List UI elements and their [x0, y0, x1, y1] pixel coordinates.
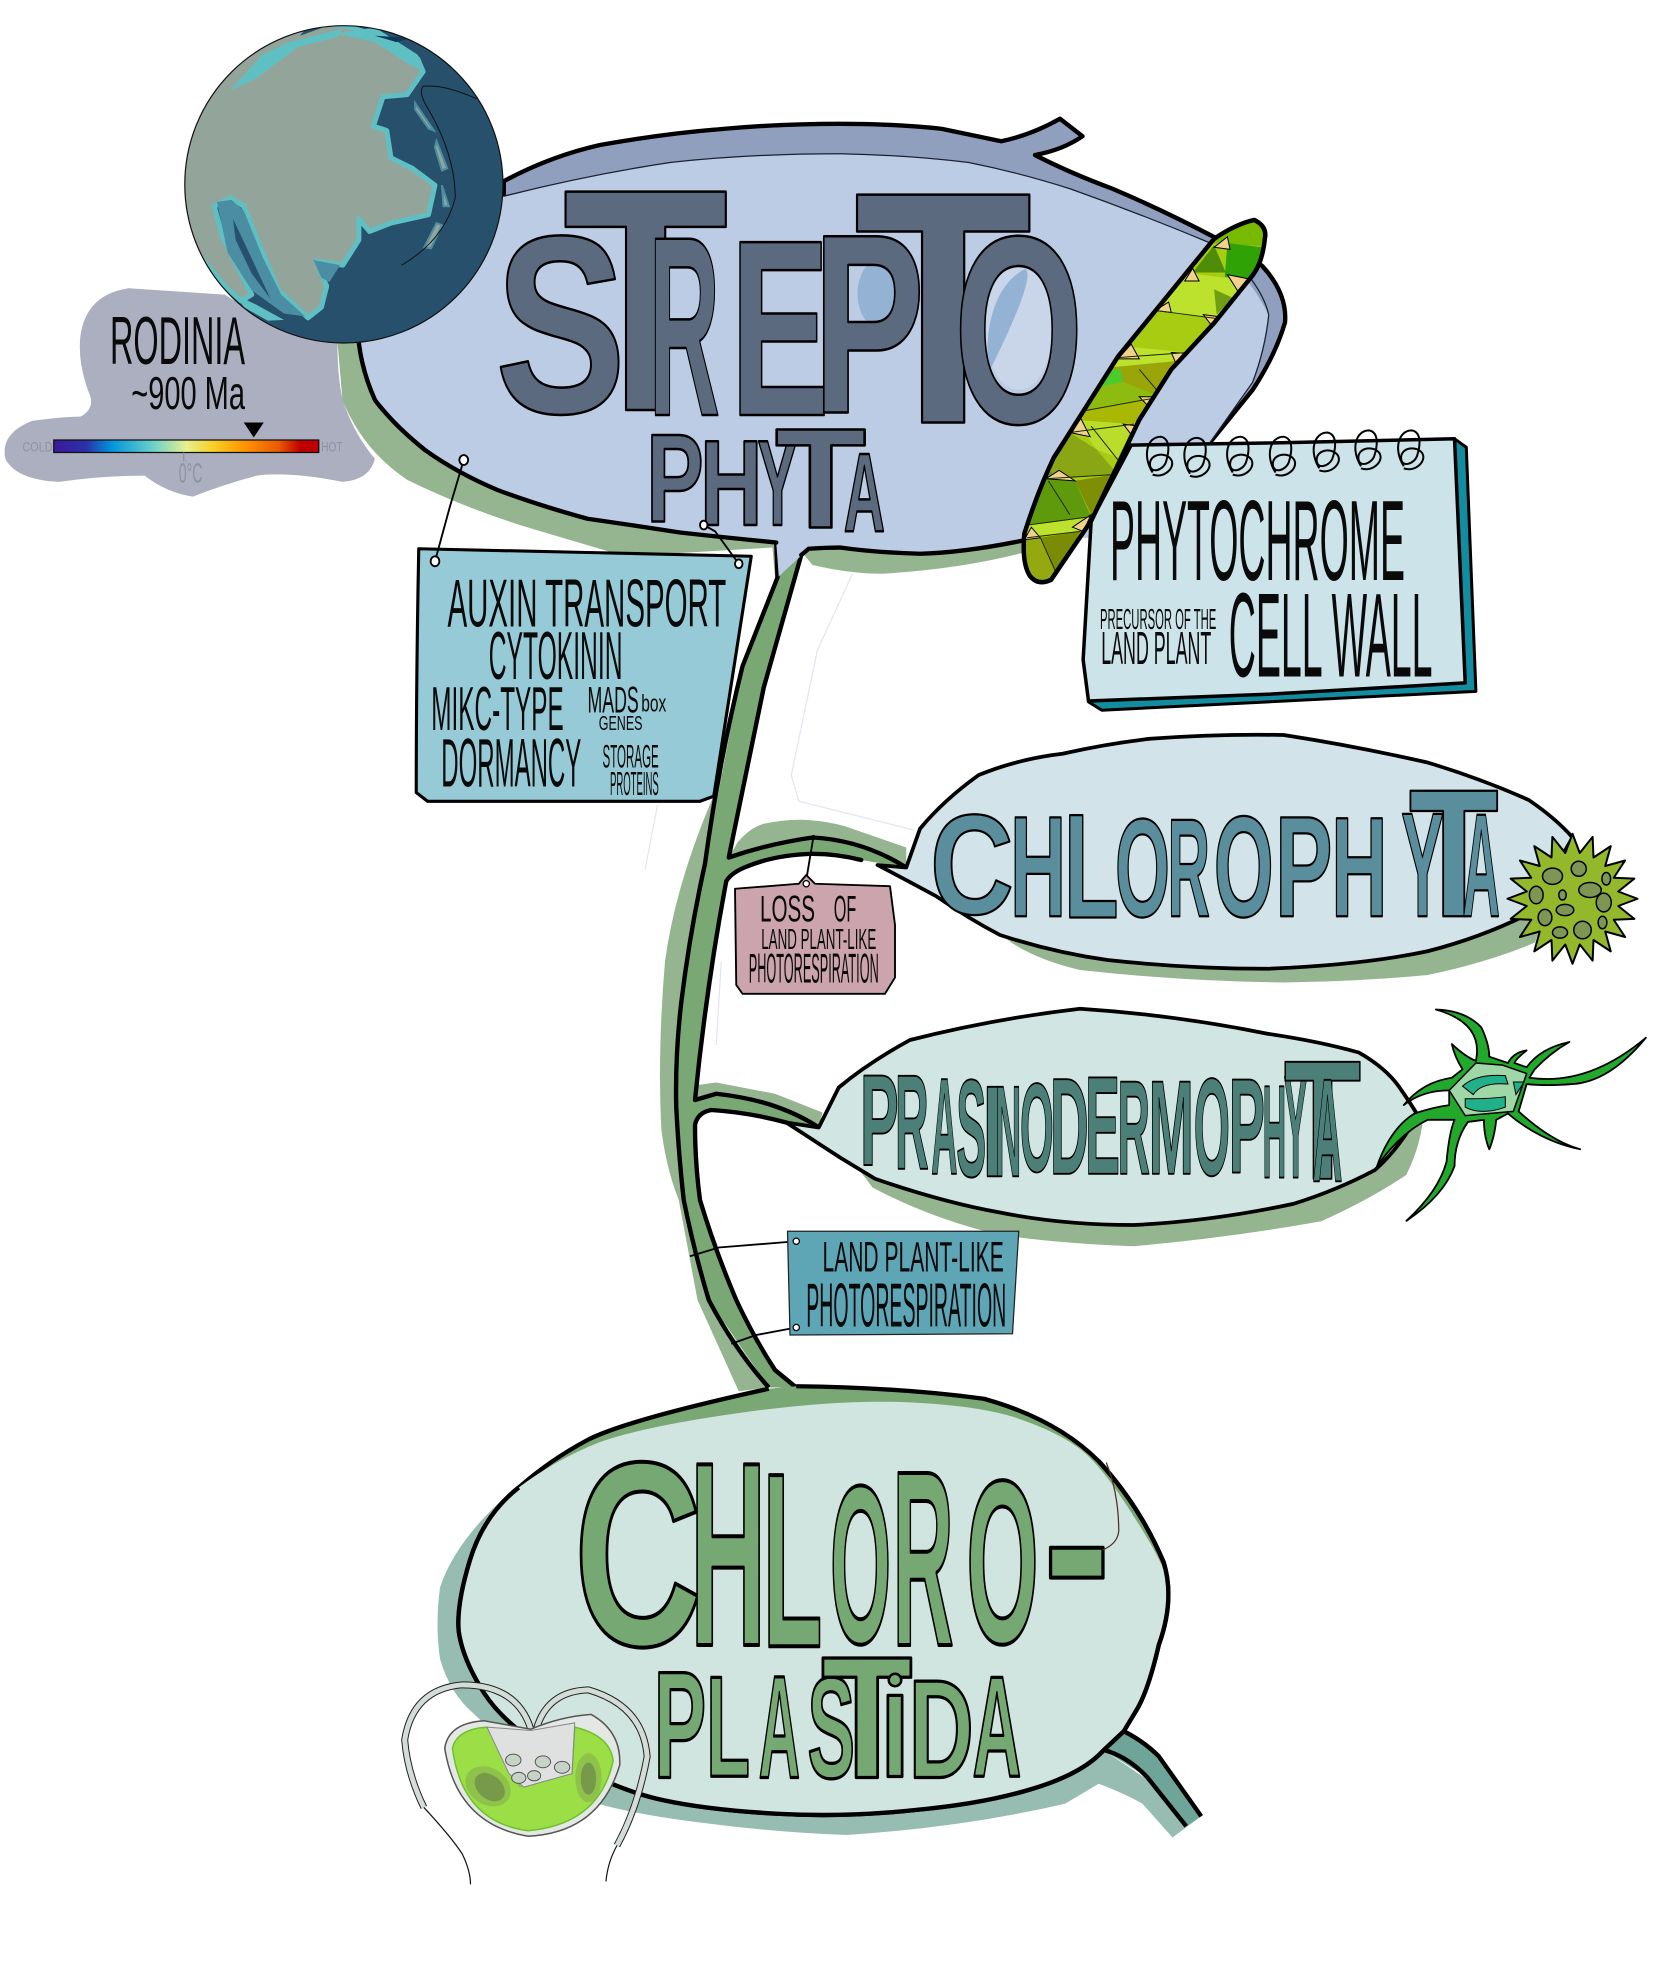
- polar cap: [300, 28, 323, 36]
- icon: filamentous alga: [1021, 218, 1268, 584]
- title: prasinodermophyta: H: [1262, 1058, 1286, 1206]
- green chloroplast: [452, 1727, 613, 1831]
- panel: chloroplastida: [458, 1386, 1201, 1826]
- temperature colour bar: [54, 440, 319, 452]
- green shadows of stem and branches: [338, 338, 1550, 1838]
- spiked body: [1508, 834, 1638, 964]
- landmass: [161, 17, 435, 318]
- hanging string: [806, 835, 814, 880]
- title: Strepto: P: [812, 181, 925, 467]
- stem and branches: [676, 542, 906, 1388]
- chloroplasts: [1463, 1075, 1524, 1111]
- label: box: box: [641, 690, 666, 717]
- panel: chlorophyta: A: [1462, 783, 1500, 948]
- title: prasinodermophyta: P: [860, 1047, 899, 1193]
- title: chloro-: H: [690, 1407, 766, 1701]
- stem left outline: [676, 542, 778, 1388]
- sign: land-plant traits: MIKC-TYPE: [431, 674, 564, 744]
- eyelet: [803, 881, 809, 887]
- title: plastida: P: [654, 1641, 706, 1811]
- title: chlorophyta: H: [1010, 787, 1066, 947]
- title: chlorophyta: T: [1409, 751, 1499, 955]
- eyelets: [793, 1238, 799, 1331]
- prasinodermophyta branch shadow: [695, 1082, 822, 1128]
- west shelf: [230, 29, 343, 90]
- spiral rings: [1147, 430, 1423, 477]
- title: chlorophyta: P: [1275, 787, 1332, 947]
- text: PHOTORESPIRATION: [749, 946, 879, 992]
- letter window highlights: [985, 265, 1052, 390]
- flagella tips: [424, 1807, 617, 1884]
- polar sea: [375, 36, 412, 42]
- title: prasinodermophyta: P: [1229, 1051, 1265, 1202]
- hanging strings: [435, 460, 739, 564]
- icon: spiky green alga: [1508, 834, 1638, 964]
- text: PHOTORESPIRATION: [806, 1270, 1006, 1340]
- title: chlorophyta: H: [1331, 788, 1387, 947]
- sign: land-plant traits: CYTOKININ: [489, 619, 622, 694]
- title: phyta: P: [646, 409, 704, 548]
- title: chloro-: R: [892, 1419, 954, 1698]
- notebook: phytochrome: LAND PLANT: [1101, 622, 1211, 674]
- title: Strepto: E: [730, 189, 830, 469]
- sign: land-plant traits: PROTEINS: [610, 765, 659, 803]
- label: age: ~900 Ma: [131, 367, 245, 419]
- cell arms: [1377, 1010, 1646, 1221]
- title: prasinodermophyta: R: [1117, 1054, 1150, 1203]
- sign: land-plant traits: DORMANCY: [441, 724, 581, 801]
- title: chlorophyta: R: [1167, 789, 1210, 946]
- grey caption blob: [5, 288, 375, 497]
- tail branch: [1104, 1731, 1201, 1826]
- text: AUXIN TRANSPORT: [447, 566, 726, 641]
- label: zero degrees: 0°C: [179, 457, 202, 488]
- bottom outline: [458, 1461, 1168, 1815]
- sign: land plant-like photorespiration: LAND PLANT-LIKE: [822, 1234, 1004, 1281]
- title: prasinodermophyta: O: [1194, 1050, 1230, 1205]
- eyelets: [431, 455, 742, 568]
- deep inlet: [233, 219, 270, 299]
- panel: prasinodermophyta: [786, 1009, 1418, 1225]
- zero tick: [183, 452, 185, 461]
- pyrenoid left: [456, 1760, 520, 1813]
- chloroplastida shadow: [438, 1486, 1201, 1838]
- green rim and outer outline: [458, 1386, 1168, 1815]
- title: chloro-: O: [830, 1439, 891, 1691]
- bottom outline: [359, 342, 1038, 555]
- title: prasinodermophyta: S: [956, 1051, 986, 1206]
- title: prasinodermophyta: E: [1085, 1047, 1120, 1204]
- alga outline: [1024, 220, 1265, 582]
- marker triangle: [244, 422, 264, 438]
- pyrenoid right core: [581, 1763, 596, 1795]
- strings: [690, 1241, 796, 1344]
- icon: branching green cell: [1377, 1010, 1646, 1221]
- stem fill: [676, 555, 906, 1388]
- bay shelf: [313, 260, 340, 282]
- title: plastida: A: [759, 1646, 800, 1809]
- dot of letter i: [889, 1674, 901, 1686]
- panel: streptophyta: [359, 119, 1285, 576]
- title: chlorophyta: C: [930, 786, 1014, 945]
- light body: [359, 154, 1269, 576]
- surface plates: [1529, 861, 1611, 939]
- sign board: [416, 549, 751, 801]
- title: prasinodermophyta: O: [1020, 1057, 1054, 1198]
- title: prasinodermophyta: M: [1149, 1054, 1194, 1203]
- title: plastida: T: [821, 1621, 912, 1814]
- flagella fill: [405, 1685, 647, 1846]
- sign: land-plant traits: [416, 455, 751, 803]
- title: plastida: I: [881, 1670, 909, 1801]
- sign: land-plant traits: MADS: [587, 678, 639, 720]
- sign board: [735, 875, 895, 994]
- title: chloro-: O: [966, 1434, 1039, 1693]
- title: chlorophyta: O: [1115, 789, 1170, 946]
- rodinia caption panel: [5, 288, 375, 497]
- title: chloro-: L: [762, 1421, 822, 1699]
- streptophyta right shadow: [800, 538, 1038, 574]
- tail outline: [1104, 1731, 1201, 1826]
- title: plastida: S: [807, 1649, 855, 1809]
- label: hot: HOT: [321, 439, 343, 454]
- subduction line: [402, 86, 477, 265]
- title: Strepto: O: [954, 181, 1084, 480]
- bubble: [878, 735, 1572, 969]
- panel: chloroplastida: A: [972, 1647, 1021, 1807]
- title: prasinodermophyta: A: [931, 1051, 957, 1204]
- title: chlorophyta: O: [1214, 787, 1274, 947]
- notebook back edge: [1088, 439, 1476, 710]
- cell wall: [445, 1714, 620, 1836]
- stem right outline and upper branch: [695, 555, 906, 1388]
- prasinodermophyta bubble shadow: [825, 1100, 1422, 1246]
- chlorophyta bubble shadow: [975, 900, 1550, 982]
- title: chlorophyta: L: [1064, 782, 1119, 949]
- title: chloro-: -: [1042, 1402, 1111, 1681]
- pale body: [458, 1402, 1167, 1815]
- islands: [415, 103, 449, 248]
- thin brown line: [1102, 1462, 1119, 1550]
- nucleus zone: [487, 1723, 575, 1787]
- label: cold: COLD: [22, 439, 53, 454]
- sign: loss of photorespiration: [735, 835, 895, 994]
- rodinia caption panel: RODINIA: [110, 304, 245, 379]
- vacuoles: [506, 1754, 570, 1783]
- title: chloro-: C: [574, 1407, 702, 1701]
- pyrenoid left core: [468, 1769, 511, 1805]
- cross-wall ends: [1024, 237, 1249, 540]
- notebook: phytochrome: [1083, 430, 1476, 710]
- title: Strepto: T: [854, 124, 1032, 493]
- title: Strepto: R: [649, 184, 720, 470]
- sign: loss of photorespiration: OF: [834, 887, 856, 929]
- title: phyta: Y: [757, 415, 797, 551]
- title: prasinodermophyta: T: [1284, 1026, 1361, 1216]
- title: phyta: A: [844, 429, 885, 555]
- panel: prasinodermophyta: A: [1312, 1048, 1342, 1213]
- sign: loss of photorespiration: LAND PLANT-LIKE: [761, 924, 876, 956]
- title: Strepto: S: [495, 182, 626, 466]
- title: Strepto: T: [562, 124, 729, 478]
- label: genes: GENES: [599, 713, 642, 735]
- inland sea: [217, 200, 305, 316]
- inner rim line: [504, 154, 1269, 442]
- streptophyta and stem shadow: [338, 338, 778, 1391]
- title: phyta: T: [775, 400, 866, 559]
- title: prasinodermophyta: N: [995, 1058, 1021, 1204]
- bright chloroplast spot: [1102, 369, 1123, 386]
- cell divider lines: [1027, 310, 1219, 573]
- title: plastida: L: [706, 1647, 750, 1807]
- title: prasinodermophyta: I: [982, 1058, 1002, 1204]
- coloured cell bands: [1026, 222, 1263, 580]
- label: loss: LOSS: [760, 887, 815, 929]
- title: chlorophyta: Y: [1401, 781, 1444, 948]
- ocean: [185, 26, 503, 343]
- sign: land-plant traits: STORAGE: [602, 738, 659, 774]
- notebook shapes and spiral rings: [1083, 430, 1476, 710]
- title: plastida: D: [909, 1651, 974, 1807]
- north shelf: [340, 28, 420, 70]
- notebook page: [1083, 439, 1465, 701]
- title: prasinodermophyta: R: [895, 1047, 929, 1198]
- icon: biflagellate green cell: [405, 1685, 647, 1884]
- title: phyta: H: [700, 415, 762, 551]
- sign board: [788, 1231, 1019, 1335]
- sign: land plant-like photorespiration: [690, 1231, 1019, 1344]
- panel: chlorophyta: [878, 735, 1572, 969]
- notebook: phytochrome: PRECURSOR OF THE: [1100, 604, 1216, 636]
- title: prasinodermophyta: Y: [1284, 1046, 1307, 1209]
- globe outline: [185, 26, 503, 343]
- chlorophyta branch shadow: [729, 820, 906, 868]
- bubble: [786, 1009, 1418, 1225]
- darker rim with branch stub: [504, 119, 1285, 442]
- pyrenoid right: [575, 1753, 602, 1802]
- flagella outline: [405, 1685, 647, 1846]
- title: prasinodermophyta: D: [1050, 1051, 1089, 1204]
- globe: Rodinia: [161, 17, 503, 343]
- southern shelf: [240, 296, 284, 321]
- cell interior: [1449, 1063, 1527, 1116]
- land and shelves: [185, 26, 477, 321]
